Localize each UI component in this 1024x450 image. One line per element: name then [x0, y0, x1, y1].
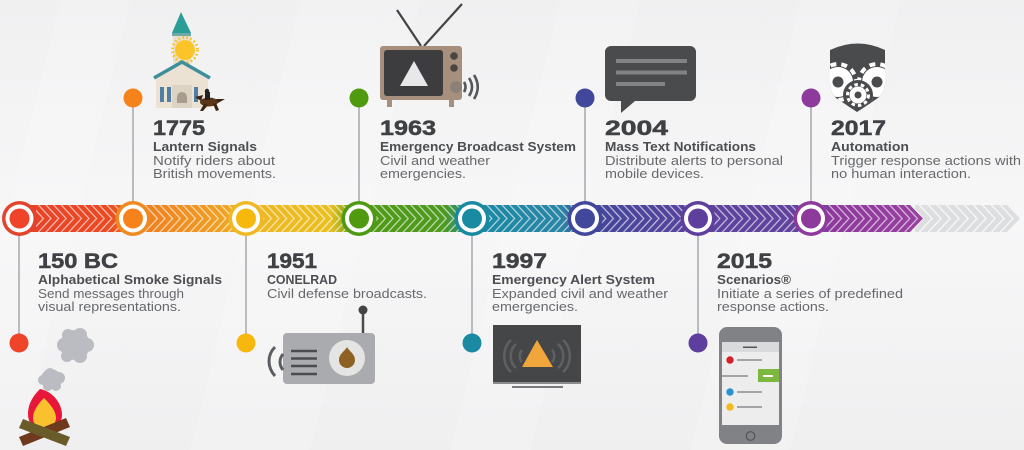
text block: 2004: Mass Text Notifications [605, 139, 756, 154]
icon: smartphone [719, 327, 782, 444]
text block: 1963 [380, 117, 576, 181]
milestone marker: 1951 [228, 201, 264, 352]
text block: 150 BC: Alphabetical Smoke Signals [38, 272, 222, 287]
text block: 1775: Notify riders about [153, 153, 275, 168]
timeline chevron band [19, 205, 1020, 232]
icon: chat bubble [605, 46, 696, 113]
icon: shield with gears [830, 44, 885, 112]
milestone marker: 2004 [568, 88, 602, 236]
text block: 1963: 1963 [380, 117, 436, 140]
text block: 2017 [831, 117, 1021, 181]
icon: television with antenna [380, 4, 478, 107]
text block: 2015: response actions. [717, 299, 829, 314]
text block: 1951: 1951 [267, 250, 317, 273]
text block: 1775: British movements. [153, 166, 276, 181]
icon: radio [269, 306, 375, 384]
text block: 1775: 1775 [153, 117, 205, 140]
milestone marker: 2017 [794, 88, 828, 236]
text block: 1963: Emergency Broadcast System [380, 139, 576, 154]
text block: 150 BC: visual representations. [38, 299, 181, 314]
text block: 1963: Civil and weather [380, 153, 491, 168]
text block: 150 BC: 150 BC [38, 250, 118, 273]
text block: 1775 [153, 117, 276, 181]
text block: 2015: Initiate a series of predefined [717, 286, 903, 301]
text block: 2004: 2004 [605, 117, 668, 140]
milestone marker: 1775 [116, 88, 150, 236]
text block: 2015: Scenarios® [717, 272, 791, 287]
text block: 1997: emergencies. [492, 299, 578, 314]
text block: 1997 [492, 250, 669, 314]
text block: 1997: Emergency Alert System [492, 272, 655, 287]
text block: 2004 [605, 117, 783, 181]
milestone marker: 1963 [342, 88, 376, 236]
text block: 2015: 2015 [717, 250, 772, 273]
text block: 1775: Lantern Signals [153, 139, 257, 154]
text block: 1963: emergencies. [380, 166, 466, 181]
milestone marker: 150 BC [2, 201, 37, 352]
milestone marker: 1997 [454, 201, 490, 352]
text block: 1997: Expanded civil and weather [492, 286, 669, 301]
icon: campfire with smoke [19, 328, 94, 446]
text block: 2017: 2017 [831, 117, 886, 140]
text block: 150 BC [38, 250, 222, 314]
text block: 1951: CONELRAD [267, 272, 337, 287]
icon: alert display [493, 325, 581, 388]
icon: church with sun and rider [154, 12, 225, 111]
text block: 2004: mobile devices. [605, 166, 704, 181]
text block: 2017: no human interaction. [831, 166, 971, 181]
text block: 1951: Civil defense broadcasts. [267, 286, 427, 301]
milestone marker: 2015 [680, 201, 716, 352]
text block: 150 BC: Send messages through [38, 286, 184, 301]
text block: 2004: Distribute alerts to personal [605, 153, 783, 168]
text block: 1997: 1997 [492, 250, 547, 273]
text block: 1951 [267, 250, 427, 301]
text block: 2017: Automation [831, 139, 909, 154]
text block: 2015 [717, 250, 903, 314]
text block: 2017: Trigger response actions with [831, 153, 1021, 168]
